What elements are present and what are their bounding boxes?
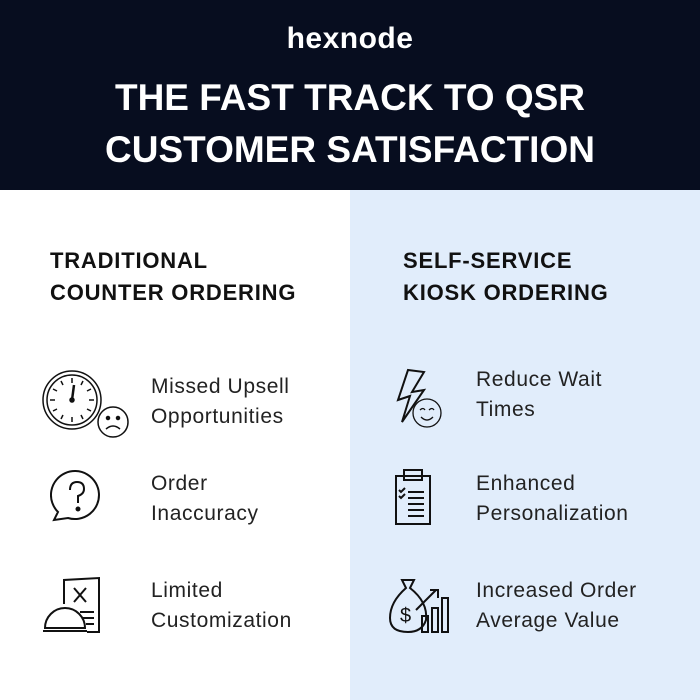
title [105,77,595,170]
heading: traditional [50,248,296,305]
icon: money bag growth [389,579,449,633]
icon: question bubble [50,470,100,522]
panel: kiosk background [350,190,700,700]
header [0,0,700,190]
text: limited customization: Limited [151,579,223,602]
icon: menu cloche [43,577,100,633]
text: increased order value: Average Value [476,609,620,632]
text: order inaccuracy [151,472,259,525]
heading: kiosk [403,248,609,305]
text: reduce wait: Reduce Wait [476,368,602,391]
icon: clock sad [42,370,129,438]
text: increased order value [476,579,637,632]
text: enhanced personalization: Enhanced [476,472,575,495]
icon: clipboard [395,469,431,525]
text: enhanced personalization: Personalization [476,502,629,525]
text: limited customization: Customization [151,609,292,632]
title: THE FAST TRACK TO QSR [115,77,585,118]
text: reduce wait: Times [476,398,535,421]
icon: money bag growth: $ [400,605,411,627]
text: missed upsell [151,375,290,428]
logo: hexnode [287,22,413,55]
title: CUSTOMER SATISFACTION [105,129,595,170]
heading: kiosk: SELF-SERVICE [403,248,572,273]
heading: traditional: COUNTER ORDERING [50,280,296,305]
text: limited customization [151,579,292,632]
text: increased order value: Increased Order [476,579,637,602]
heading: kiosk: KIOSK ORDERING [403,280,609,305]
text: order inaccuracy: Inaccuracy [151,502,259,525]
heading: traditional: TRADITIONAL [50,248,208,273]
icon: bolt smile [396,368,442,428]
text: missed upsell: Opportunities [151,405,284,428]
text: missed upsell: Missed Upsell [151,375,290,398]
text: reduce wait [476,368,602,421]
text: enhanced personalization [476,472,629,525]
text: order inaccuracy: Order [151,472,208,495]
